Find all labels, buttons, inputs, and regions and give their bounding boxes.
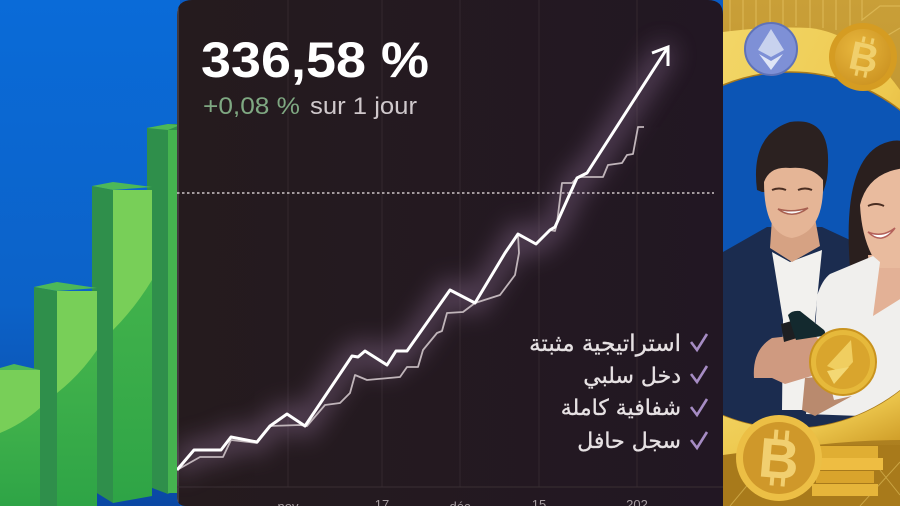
grid lines	[288, 0, 637, 487]
item 1: استراتيجية مثبتة	[529, 331, 681, 357]
jacket	[723, 227, 856, 440]
bar 4	[147, 124, 180, 494]
smile	[868, 228, 895, 238]
item 4: سجل حافل	[577, 429, 681, 454]
bar 1	[0, 364, 40, 506]
benefits checklist	[529, 331, 707, 454]
phones	[781, 311, 825, 342]
bar 2	[34, 282, 97, 506]
chest skin	[868, 255, 900, 316]
face	[860, 168, 900, 268]
coin: bitcoin large	[736, 415, 822, 501]
coin: bitcoin large: B	[756, 425, 802, 492]
x axis labels	[278, 497, 648, 506]
hair	[756, 121, 828, 192]
bar 3	[92, 182, 152, 503]
coin: bitcoin top: B	[845, 33, 882, 83]
lower gold background	[723, 445, 900, 506]
coin: ethereum gold	[810, 329, 876, 395]
green 3D bars	[0, 124, 180, 506]
face	[764, 168, 823, 238]
item 3: شفافية كاملة	[561, 396, 681, 421]
dotted reference line	[177, 192, 714, 194]
lower ring band	[723, 391, 900, 455]
blouse	[806, 256, 900, 416]
daily change	[203, 93, 417, 120]
daily change: +0,08 %	[203, 93, 300, 120]
woman	[806, 141, 900, 416]
neck	[770, 218, 820, 262]
item 2: دخل سلبي	[583, 364, 681, 389]
right gold background	[723, 0, 900, 506]
hair	[849, 141, 900, 280]
panel edge highlight	[178, 8, 179, 502]
headline value: 336,58 %	[201, 32, 429, 88]
woman arm	[802, 376, 852, 416]
hands	[754, 335, 823, 384]
eyes and smile	[772, 188, 812, 190]
blue circle portrait backdrop	[723, 71, 900, 428]
dark chart panel	[177, 0, 723, 506]
line glow	[177, 47, 668, 470]
line chart	[177, 47, 668, 470]
coin stack	[812, 446, 883, 496]
benchmark line	[177, 127, 644, 470]
daily change: sur 1 jour	[310, 93, 417, 120]
coin: bitcoin top	[829, 23, 897, 91]
circuit stripes	[730, 0, 900, 35]
gold ring	[723, 28, 900, 109]
arrow head	[652, 47, 668, 66]
man	[723, 121, 856, 440]
coin: ethereum blue	[745, 23, 797, 75]
main white line	[177, 47, 668, 470]
left blue background	[0, 0, 180, 506]
photo: two people	[723, 121, 900, 440]
shirt	[772, 250, 822, 410]
